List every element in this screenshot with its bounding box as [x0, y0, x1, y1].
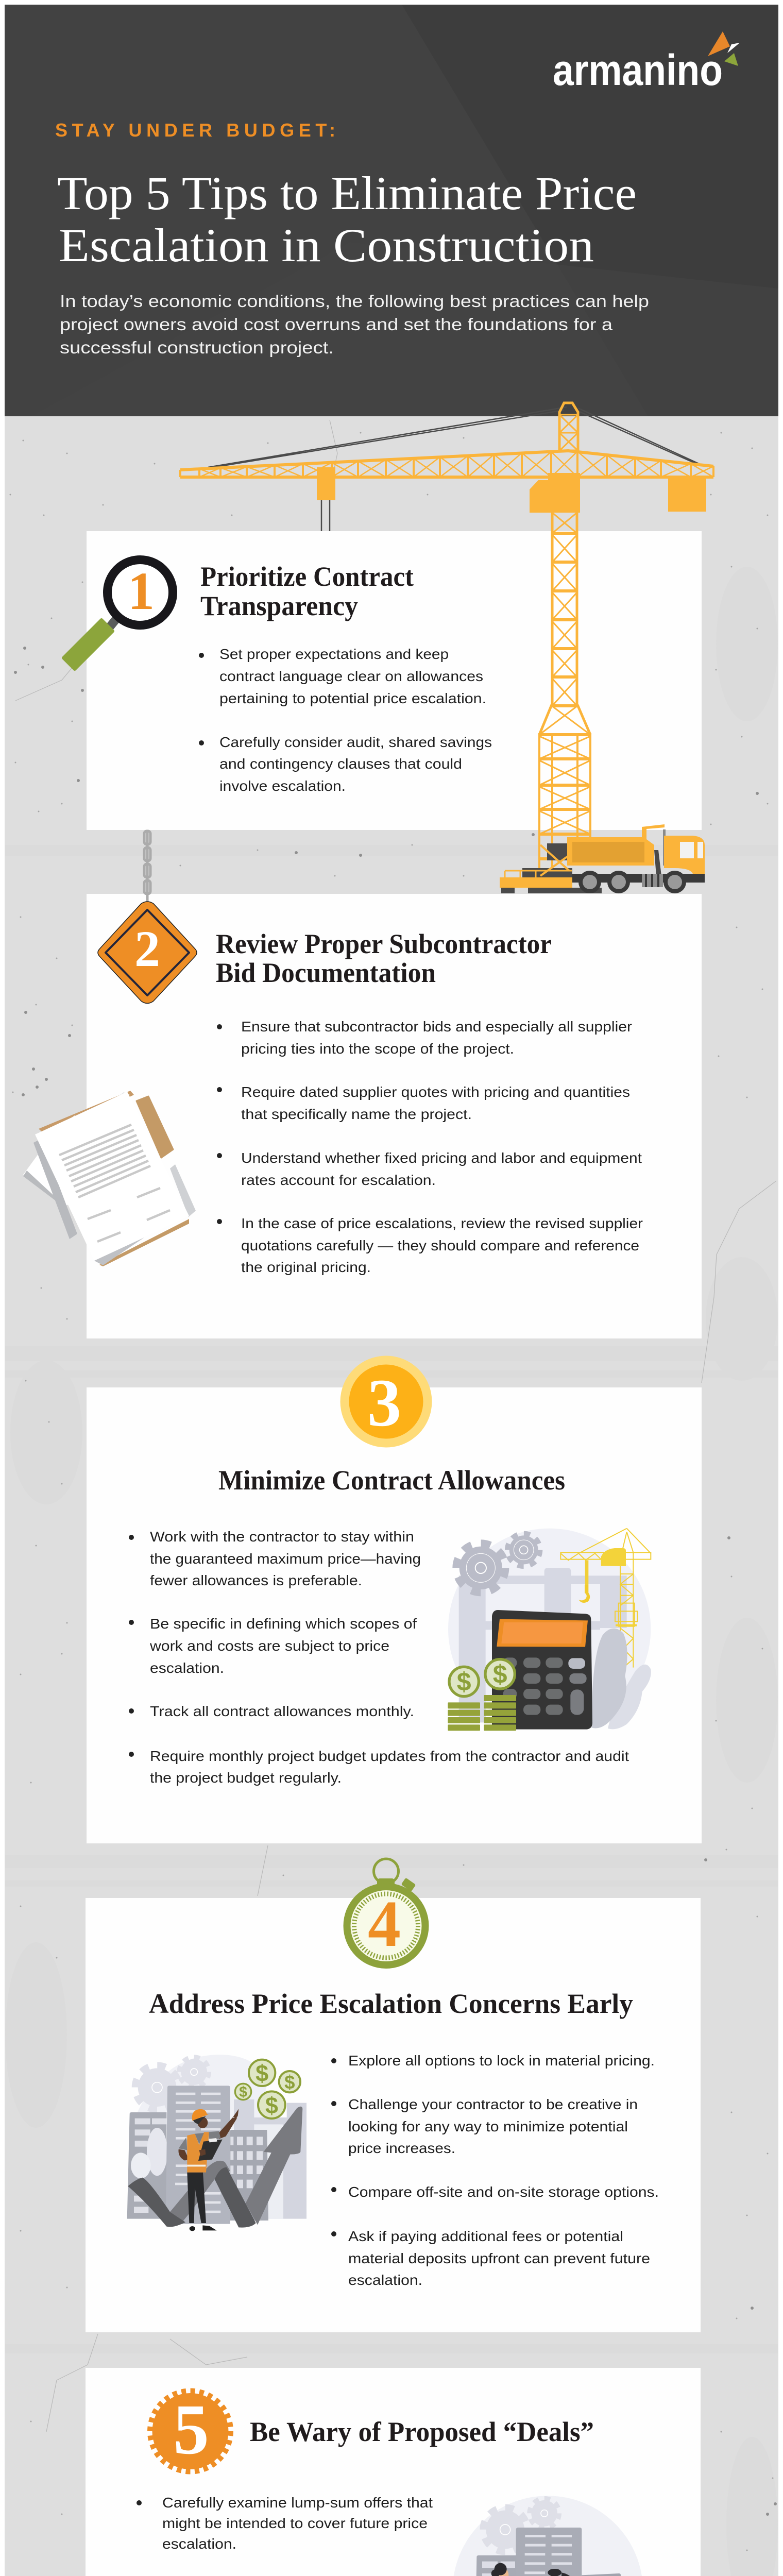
header band — [5, 5, 778, 416]
bullets 2: Require dated supplier quotes with pricing and quantities — [241, 1084, 630, 1100]
panel 1: prioritize contract transparency — [87, 531, 702, 830]
intro text — [60, 292, 649, 357]
bullets 3: escalation. — [150, 1660, 224, 1676]
heading 4: Address Price Escalation Concerns Early — [149, 1988, 633, 2019]
man in suit — [482, 2563, 524, 2576]
worker — [178, 2109, 239, 2231]
illustration: worker and rising arrow — [127, 2055, 307, 2231]
crane base — [500, 843, 602, 893]
crane — [180, 403, 713, 893]
boom — [180, 451, 713, 477]
bullets 3: fewer allowances is preferable. — [150, 1572, 362, 1588]
icon: gold coin 3 — [340, 1356, 432, 1448]
bullets 3: Work with the contractor to stay within — [150, 1529, 414, 1545]
bullets 1: involve escalation. — [219, 778, 346, 794]
bullets 4: Compare off-site and on-site storage options. — [348, 2184, 659, 2200]
bullets 5: escalation. — [162, 2536, 236, 2552]
bullets 3: work and costs are subject to price — [149, 1638, 389, 1654]
coins — [235, 2060, 300, 2119]
gears — [483, 2499, 559, 2552]
bullets 2: Understand whether fixed pricing and labor and equipment — [241, 1150, 642, 1166]
icon: starburst 5 — [150, 2390, 231, 2471]
icon: stopwatch 4: 4 — [368, 1887, 401, 1960]
intro text: project owners avoid cost overruns and set the foundations for a — [60, 315, 613, 334]
gears — [135, 2057, 209, 2109]
bullets 5: might be intended to cover future price — [162, 2515, 428, 2531]
dump truck — [567, 824, 705, 893]
coins: $ — [265, 2092, 278, 2119]
counterweight — [668, 479, 706, 512]
illustration: calculator, coins and crane — [448, 1529, 651, 1731]
bullets 1: Carefully consider audit, shared savings — [219, 734, 492, 750]
heading 2: Review Proper Subcontractor — [216, 928, 552, 959]
eyebrow: STAY UNDER BUDGET: — [55, 120, 335, 141]
heading 1: Prioritize Contract — [200, 561, 414, 592]
icon: magnifier with number 1: 1 — [128, 562, 155, 621]
bullets 1: contract language clear on allowances — [219, 668, 483, 684]
cracks — [15, 420, 776, 2432]
bullets 2: Ensure that subcontractor bids and especially all supplier — [241, 1019, 632, 1035]
title: Top 5 Tips to Eliminate Price — [57, 167, 637, 219]
icon: stack of documents — [23, 1091, 196, 1266]
bullets 3: Require monthly project budget updates from the contractor and audit — [150, 1748, 629, 1764]
arrow — [170, 2161, 230, 2222]
title: Escalation in Construction — [59, 219, 594, 272]
bullets 3: Be specific in defining which scopes of — [150, 1616, 417, 1632]
bullets 2: that specifically name the project. — [241, 1106, 472, 1122]
intro text: successful construction project. — [60, 338, 334, 357]
illustration: handshake between two people — [452, 2496, 643, 2576]
chain — [144, 830, 150, 904]
bullets 2: pricing ties into the scope of the project. — [241, 1041, 514, 1057]
bullets 4: material deposits upfront can prevent future — [348, 2250, 650, 2266]
bullets 3: the guaranteed maximum price—having — [150, 1551, 421, 1567]
panel 2: subcontractor bid documentation — [87, 894, 702, 1338]
crane — [560, 1529, 651, 1676]
bullets 3: the project budget regularly. — [150, 1770, 342, 1786]
coins: $ — [284, 2072, 295, 2093]
operator cab — [530, 473, 580, 513]
bullets 2: quotations carefully — they should compare and reference — [241, 1238, 639, 1253]
panel 4: address price escalation concerns early — [86, 1898, 701, 2332]
icon: magnifier with number 1 — [63, 560, 173, 669]
heading 5: Be Wary of Proposed “Deals” — [250, 2416, 594, 2447]
panel 3: minimize contract allowances — [87, 1387, 702, 1843]
bullets 4: escalation. — [348, 2272, 422, 2288]
woman — [524, 2569, 583, 2576]
bullets 1: and contingency clauses that could — [219, 756, 462, 772]
logo: armanino: armanino — [553, 46, 723, 94]
heading 2: Bid Documentation — [216, 957, 436, 988]
icon: gold coin 3: 3 — [367, 1365, 401, 1440]
title — [57, 167, 637, 272]
heading 1 — [200, 561, 414, 621]
bullets 4: Ask if paying additional fees or potential — [348, 2228, 623, 2244]
intro text: In today’s economic conditions, the following best practices can help — [60, 292, 649, 311]
bullets 3: Track all contract allowances monthly. — [150, 1703, 414, 1719]
panel 5: be wary of proposed deals — [86, 2368, 701, 2576]
trolley block — [317, 467, 335, 500]
coins: $ — [493, 1660, 507, 1689]
bullets 2: the original pricing. — [241, 1259, 371, 1275]
bullets 2: In the case of price escalations, review the revised supplier — [241, 1215, 643, 1231]
cables — [208, 407, 701, 531]
bullets 4 — [331, 2053, 659, 2288]
bullets 5 — [137, 2495, 578, 2576]
icon: chain and diamond sign 2 — [98, 830, 197, 1004]
bullets 1 — [199, 646, 492, 794]
icon: chain and diamond sign 2: 2 — [134, 920, 160, 977]
bullets 2: rates account for escalation. — [241, 1172, 436, 1188]
icon: starburst 5: 5 — [173, 2390, 209, 2469]
gears — [456, 1534, 540, 1592]
bullets 1: Set proper expectations and keep — [219, 646, 449, 662]
bullets 2 — [217, 1019, 643, 1275]
crane mast head — [559, 403, 578, 451]
coins — [448, 1659, 516, 1731]
bullets 3 — [129, 1529, 629, 1786]
heading 2 — [216, 928, 552, 988]
calculator — [492, 1610, 592, 1730]
bullets 4: Challenge your contractor to be creative in — [348, 2096, 638, 2112]
bullets 4: Explore all options to lock in material pricing. — [348, 2053, 655, 2069]
heading 1: Transparency — [200, 590, 358, 621]
leaves — [608, 1665, 651, 1729]
coins: $ — [239, 2084, 247, 2100]
bullets 4: price increases. — [348, 2140, 455, 2156]
bullets 5: Carefully examine lump-sum offers that — [162, 2495, 433, 2511]
narrow mast — [551, 513, 578, 706]
bullets 4: looking for any way to minimize potential — [348, 2119, 628, 2134]
mast flare and wide tower — [538, 705, 591, 876]
heading 3: Minimize Contract Allowances — [218, 1465, 565, 1496]
coins: $ — [457, 1668, 471, 1697]
bullets 1: pertaining to potential price escalation. — [219, 690, 486, 706]
coins: $ — [256, 2060, 268, 2086]
icon: stopwatch 4 — [343, 1859, 429, 1969]
